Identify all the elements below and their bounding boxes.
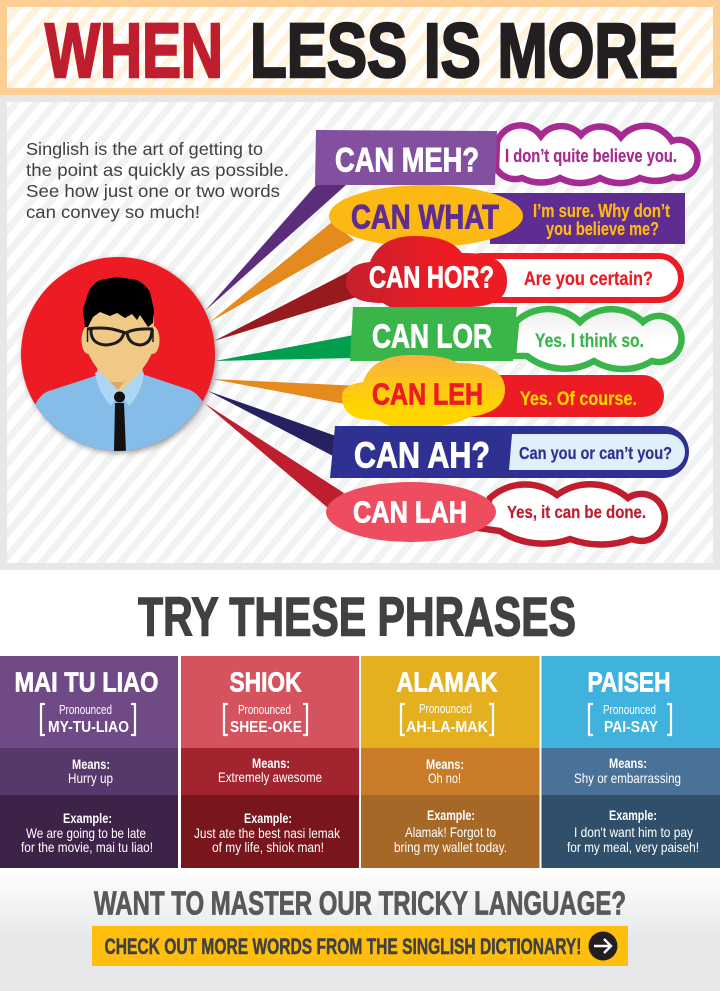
phrase: can what — [329, 185, 685, 247]
card: shiok: Extremely awesome — [218, 769, 322, 785]
card: shiok: SHEE-OKE — [230, 719, 302, 736]
title — [45, 8, 678, 94]
phrase: can ah — [330, 426, 689, 478]
card: alamak — [361, 656, 540, 868]
card: paiseh: I don't want him to pay — [574, 824, 693, 840]
rays from person to phrases — [204, 185, 360, 508]
intro text: the point as quickly as possible. — [26, 160, 289, 180]
phrase: can ah: Can you or can’t you? — [519, 443, 672, 463]
card: paiseh: for my meal, very paiseh! — [567, 839, 699, 855]
footer call to action — [0, 869, 720, 991]
card: alamak: Alamak! Forgot to — [405, 824, 496, 840]
phrase: can what: I’m sure. Why don’t — [533, 201, 670, 221]
card: alamak: Pronounced — [419, 701, 472, 716]
phrase: can hor — [346, 236, 681, 312]
phrase: can ah: CAN AH? — [354, 434, 490, 476]
card: mai tu liao: Means: — [72, 756, 110, 772]
phrase: can meh: I don’t quite believe you. — [505, 146, 677, 166]
phrase: can leh — [342, 355, 664, 428]
icon: arrow — [588, 932, 618, 960]
card: paiseh — [542, 656, 720, 868]
card: shiok: of my life, shiok man! — [212, 839, 324, 855]
intro text: can convey so much! — [26, 202, 200, 222]
phrase: can hor: Are you certain? — [524, 269, 653, 290]
card: shiok: SHIOK — [230, 666, 302, 698]
phrase: can lah — [326, 482, 665, 545]
phrase: can lah: Yes, it can be done. — [507, 502, 646, 522]
card: mai tu liao: Pronounced — [59, 702, 112, 717]
section heading: TRY THESE PHRASES — [138, 586, 576, 648]
card: alamak: Means: — [426, 756, 464, 772]
card: mai tu liao: for the movie, mai tu liao! — [21, 839, 153, 855]
card: mai tu liao: MY-TU-LIAO — [48, 719, 129, 736]
phrase: can leh: Yes. Of course. — [520, 389, 637, 410]
card: mai tu liao: Hurry up — [68, 770, 113, 786]
title: WHEN — [45, 8, 223, 94]
phrase: can meh — [315, 125, 698, 185]
card: alamak: ALAMAK — [396, 666, 498, 698]
header banner — [0, 0, 720, 95]
card: paiseh: Means: — [609, 755, 647, 771]
card: mai tu liao: Example: — [63, 810, 112, 826]
panel: singlish expressions — [0, 95, 720, 570]
phrase: can leh: CAN LEH — [372, 376, 483, 412]
card: shiok: Means: — [252, 755, 290, 771]
intro text: Singlish is the art of getting to — [26, 139, 263, 159]
card: paiseh: PAISEH — [588, 666, 670, 698]
card: paiseh: Example: — [609, 807, 657, 823]
phrase: can lor — [350, 307, 682, 369]
card: alamak: Oh no! — [428, 770, 461, 786]
card: alamak: Example: — [427, 807, 475, 823]
card: paiseh: Pronounced — [603, 702, 656, 717]
card: mai tu liao: MAI TU LIAO — [14, 666, 158, 698]
dictionary button — [92, 926, 628, 966]
card: mai tu liao: We are going to be late — [26, 825, 146, 841]
phrase: can hor: CAN HOR? — [369, 260, 494, 294]
card: alamak: AH-LA-MAK — [406, 719, 488, 736]
card: shiok — [181, 656, 359, 868]
phrase: can lor: Yes. I think so. — [535, 331, 644, 352]
card: shiok: Just ate the best nasi lemak — [194, 825, 341, 841]
intro text — [26, 139, 289, 222]
card: alamak: bring my wallet today. — [394, 839, 507, 855]
intro text: See how just one or two words — [26, 181, 280, 201]
phrase: can lah: CAN LAH — [353, 494, 467, 530]
phrase: can lor: CAN LOR — [372, 318, 492, 356]
card: paiseh: Shy or embarrassing — [574, 770, 681, 786]
card: paiseh: PAI-SAY — [604, 719, 658, 736]
phrase: can what: CAN WHAT — [351, 198, 499, 236]
person avatar — [20, 257, 217, 460]
phrase: can what: you believe me? — [546, 219, 659, 239]
card: shiok: Example: — [244, 810, 292, 826]
phrase: can meh: CAN MEH? — [335, 142, 479, 180]
card: mai tu liao — [0, 656, 178, 868]
card: shiok: Pronounced — [238, 702, 291, 717]
